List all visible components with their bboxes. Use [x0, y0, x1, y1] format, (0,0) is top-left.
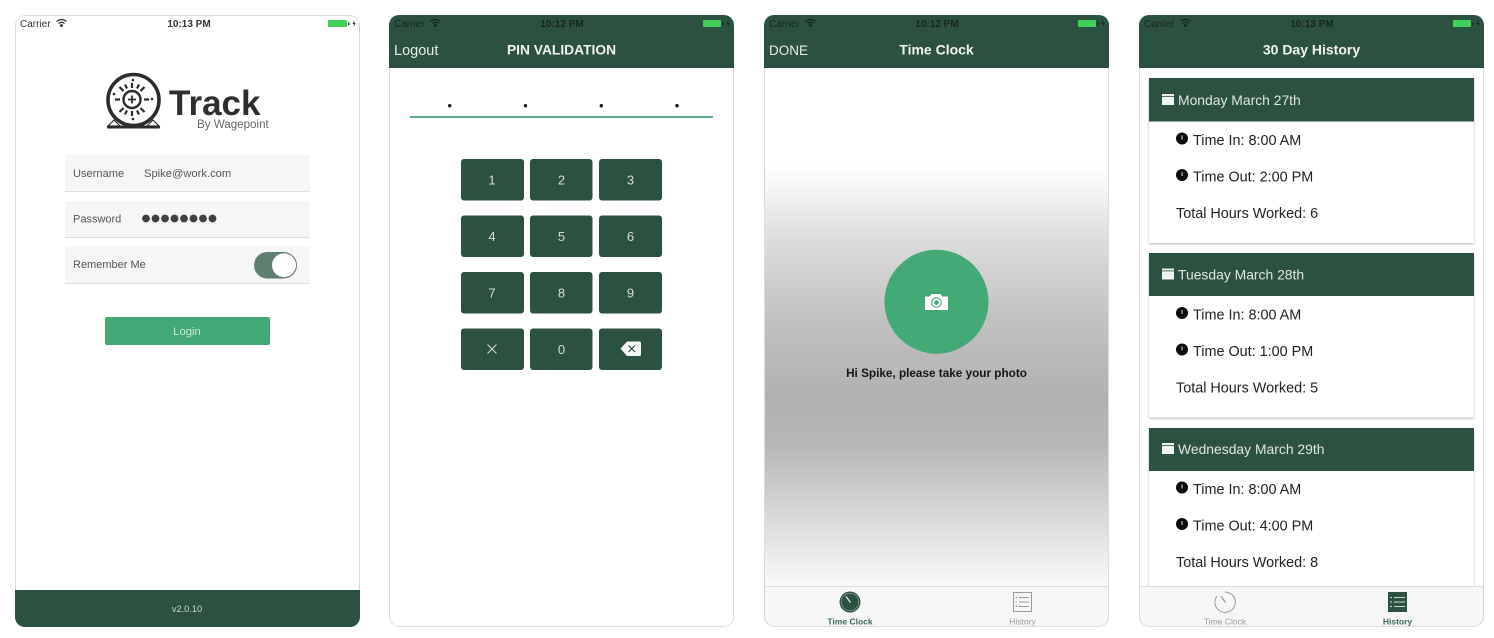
form field: remember me toggle: [65, 246, 310, 284]
card: Monday: Time In: 8:00 AM: [1193, 133, 1301, 149]
tab bar: history: History: [1383, 616, 1412, 626]
header: PIN validation: PIN VALIDATION: [507, 42, 616, 58]
keypad: 2: [558, 172, 565, 188]
keypad: 8: [558, 286, 565, 300]
header: 30 day history: 30 Day History: [1263, 42, 1360, 58]
card: Wednesday: Wednesday March 29th: [1178, 441, 1324, 457]
tab bar: time clock: [764, 586, 1108, 626]
icon: history active: [1388, 592, 1407, 612]
prompt text: Hi Spike, please take your photo: [846, 367, 1027, 380]
card: Wednesday: Total Hours Worked: 8: [1176, 555, 1318, 571]
card: Tuesday: Total Hours Worked: 5: [1176, 380, 1318, 396]
keypad: 5: [558, 229, 565, 244]
icon: cancel: [488, 344, 496, 354]
tab bar: time clock: Time Clock: [827, 616, 873, 626]
card: Monday: Time Out: 2:00 PM: [1193, 170, 1313, 186]
card: Monday: [1149, 78, 1474, 243]
button: login: Login: [173, 326, 201, 338]
header: time clock: 10:12 PM: [915, 19, 959, 30]
header: 30 day history: [1139, 15, 1484, 68]
status bar: login: 10:13 PM: [167, 19, 211, 30]
keypad: 1: [488, 172, 496, 188]
tab bar: history: Time Clock: [1204, 616, 1247, 626]
keypad: 9: [627, 286, 634, 300]
PIN entry dots and line: [410, 104, 713, 118]
card: Wednesday: Time Out: 4:00 PM: [1193, 518, 1313, 534]
icon: backspace: [620, 342, 641, 356]
form field: password: Password: [73, 214, 121, 226]
tab bar: history: [1140, 586, 1484, 626]
keypad: 3: [627, 172, 634, 188]
keypad: [461, 159, 662, 370]
card: Tuesday: [1149, 253, 1474, 418]
header: PIN validation: Carrier: [394, 19, 425, 30]
form field: username: [65, 155, 310, 192]
form field: remember me toggle: Remember Me: [73, 259, 146, 271]
tab bar: time clock: History: [1009, 616, 1036, 626]
footer: version: v2.0.10: [172, 604, 202, 614]
icon: clock inactive: [1215, 592, 1235, 612]
status bar: login: [20, 19, 356, 30]
button: login: [105, 317, 270, 345]
logo: Track by Wagepoint: Track: [169, 84, 261, 123]
card: Wednesday: Time In: 8:00 AM: [1193, 482, 1301, 498]
card: Tuesday: Time In: 8:00 AM: [1193, 308, 1301, 324]
card: Monday: Total Hours Worked: 6: [1176, 206, 1318, 222]
card: Tuesday: Time Out: 1:00 PM: [1193, 344, 1313, 360]
card: Monday: Monday March 27th: [1178, 92, 1301, 108]
header: time clock: Time Clock: [899, 42, 974, 58]
header: time clock: Carrier: [769, 19, 800, 30]
header: PIN validation: [389, 15, 734, 68]
button: take photo: [884, 250, 988, 354]
logo: Track by Wagepoint: By Wagepoint: [197, 118, 270, 131]
keypad: 4: [488, 229, 496, 244]
card: Tuesday: Tuesday March 28th: [1178, 266, 1304, 282]
icon: camera: [925, 294, 948, 310]
panel: time clock screen: [764, 15, 1109, 626]
keypad: 7: [488, 286, 496, 300]
icon: history inactive: [1014, 592, 1032, 612]
icon: clock active: [840, 592, 860, 612]
panel: PIN validation screen: [389, 15, 734, 626]
panel: login screen: [15, 16, 360, 627]
form field: password: [65, 201, 310, 238]
keypad: 6: [627, 229, 634, 244]
header: PIN validation: 10:12 PM: [540, 19, 584, 30]
card: Wednesday: [1149, 428, 1474, 586]
keypad: 0: [558, 342, 565, 357]
header: time clock: DONE: [769, 43, 808, 58]
form field: username: Spike@work.com: [144, 168, 231, 180]
header: 30 day history: 10:13 PM: [1290, 19, 1334, 30]
header: 30 day history: Carrier: [1144, 19, 1175, 30]
status bar: login: Carrier: [20, 19, 51, 30]
header: time clock: [764, 15, 1109, 68]
footer: version: [15, 590, 360, 627]
panel: 30 day history screen: [1139, 15, 1484, 626]
logo: Track by Wagepoint: [107, 74, 270, 131]
form field: username: Username: [73, 168, 124, 180]
camera backdrop gradient: [765, 165, 1108, 586]
header: PIN validation: Logout: [394, 43, 438, 59]
